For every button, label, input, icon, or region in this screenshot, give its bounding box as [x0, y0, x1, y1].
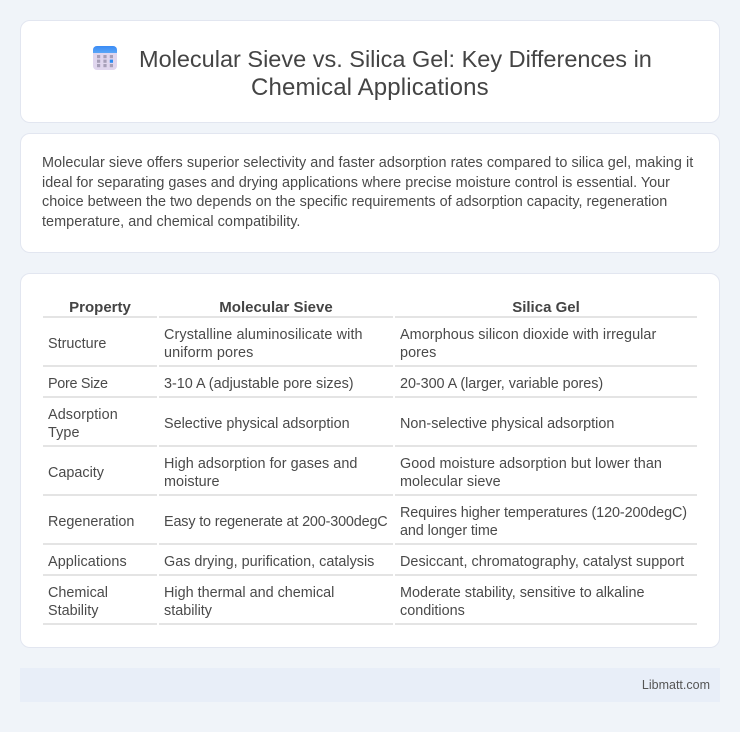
row: applications: Applications	[48, 554, 127, 570]
row: chemical stability: stability	[164, 603, 212, 619]
text block: summary	[42, 155, 694, 230]
row: capacity: High adsorption for gases and	[164, 456, 357, 472]
row: chemical stability: High thermal and chemical	[164, 585, 334, 601]
row: capacity: Capacity	[48, 465, 104, 481]
title: Molecular Sieve vs. Silica Gel: Key Differences in	[139, 46, 652, 72]
row: structure: Crystalline aluminosilicate with	[164, 327, 363, 343]
row: capacity: moisture	[164, 474, 220, 490]
comparison table	[43, 299, 697, 625]
row: structure: Structure	[48, 336, 106, 352]
row: capacity: molecular sieve	[400, 474, 501, 490]
footer text: Libmatt.com	[642, 678, 710, 692]
row: pore size	[48, 376, 603, 392]
panel: comparison table	[20, 273, 720, 648]
row: chemical stability	[48, 585, 644, 619]
row: regeneration: Regeneration	[48, 514, 134, 530]
panel: summary text	[20, 133, 720, 253]
row: structure: uniform pores	[164, 345, 253, 361]
row: capacity: Good moisture adsorption but lower than	[400, 456, 662, 472]
row: applications: Gas drying, purification, catalysis	[164, 554, 374, 570]
row: adsorption type: Selective physical adsorption	[164, 416, 350, 432]
table header row: Silica Gel	[512, 299, 580, 316]
table header row	[69, 299, 580, 316]
text block: summary: ideal for separating gases and drying applications where precise moisture control is essential. Your	[42, 174, 670, 190]
row: regeneration	[48, 505, 687, 539]
row: pore size: Pore Size	[48, 376, 108, 392]
row: regeneration: and longer time	[400, 523, 498, 539]
icon: calendar grid	[93, 46, 117, 70]
row: chemical stability: Stability	[48, 603, 98, 619]
row: pore size: 20-300 A (larger, variable pores)	[400, 376, 603, 392]
row: adsorption type: Non-selective physical adsorption	[400, 416, 614, 432]
panel: title card	[20, 20, 720, 123]
row: adsorption type: Type	[48, 425, 80, 441]
row: adsorption type	[48, 407, 614, 441]
row: adsorption type: Adsorption	[48, 407, 118, 423]
row: structure: pores	[400, 345, 436, 361]
title	[139, 46, 652, 101]
row: chemical stability: Moderate stability, sensitive to alkaline	[400, 585, 644, 601]
table header row: Molecular Sieve	[219, 299, 333, 316]
row: capacity	[48, 456, 662, 490]
row: structure	[48, 327, 656, 361]
row: chemical stability: conditions	[400, 603, 465, 619]
row: applications	[48, 554, 684, 570]
text block: summary: temperature, and chemical compatibility.	[42, 214, 300, 230]
row: applications: Desiccant, chromatography, catalyst support	[400, 554, 684, 570]
row: regeneration: Easy to regenerate at 200-300degC	[164, 514, 388, 530]
row: pore size: 3-10 A (adjustable pore sizes)	[164, 376, 354, 392]
text block: summary: choice between the two depends on the specific requirements of adsorption capacity, regeneration	[42, 194, 667, 210]
row: regeneration: Requires higher temperatures (120-200degC)	[400, 505, 687, 521]
footer bar	[20, 668, 720, 702]
text block: summary: Molecular sieve offers superior selectivity and faster adsorption rates compared to silica gel, making it	[42, 155, 693, 171]
row: structure: Amorphous silicon dioxide with irregular	[400, 327, 656, 343]
title: Chemical Applications	[251, 74, 489, 101]
row: chemical stability: Chemical	[48, 585, 108, 601]
table header row: Property	[69, 299, 131, 316]
